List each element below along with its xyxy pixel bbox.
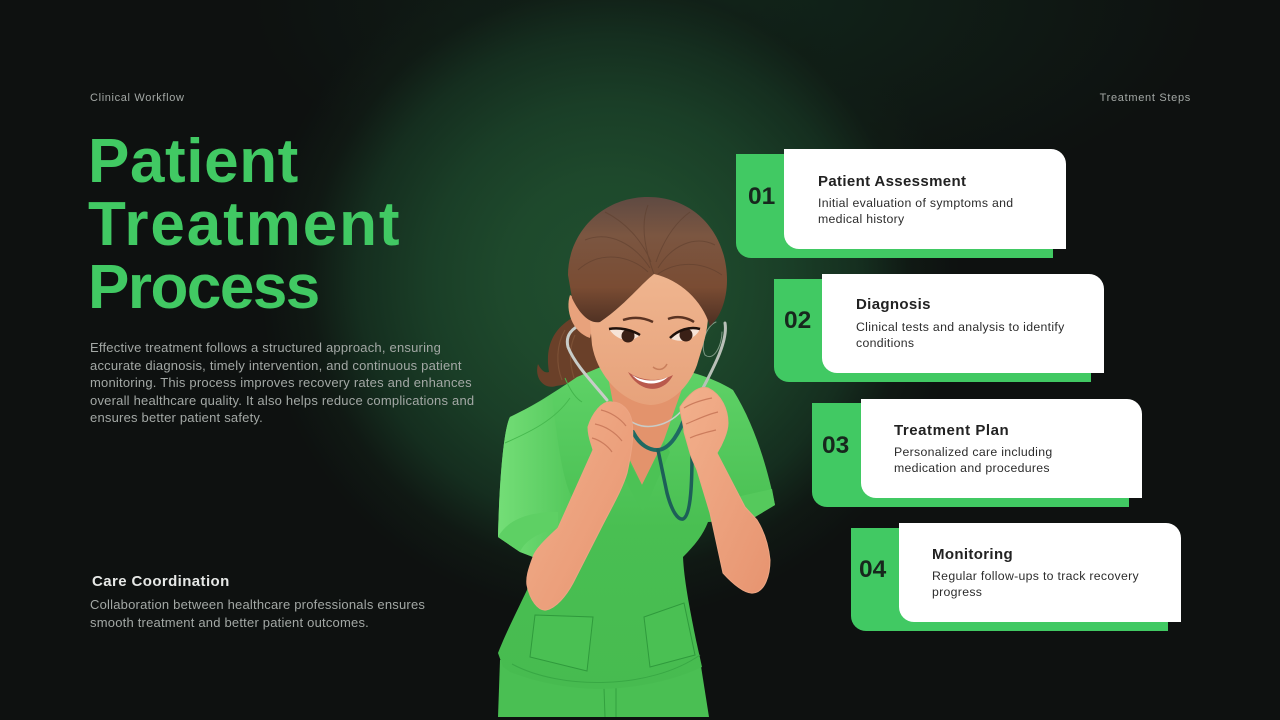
step number 01: 01 (748, 183, 775, 210)
face (588, 272, 708, 405)
step title: treatment plan: Treatment Plan (894, 422, 1009, 439)
ear (568, 295, 596, 338)
title: Patient (88, 127, 299, 196)
step title: diagnosis: Diagnosis (856, 296, 931, 313)
step number 04: 04 (859, 556, 886, 583)
left arm and hand (527, 402, 633, 610)
step card 01 (736, 149, 1066, 258)
nose (653, 364, 667, 369)
step description (818, 196, 1013, 226)
hair dome (568, 197, 727, 326)
right arm and hand (680, 387, 770, 593)
text block: intro paragraph: ensures better patient safety. (90, 410, 263, 425)
mouth (628, 372, 673, 389)
text block: intro paragraph: Effective treatment follows a structured approach, ensuring (90, 340, 441, 355)
step description: conditions (856, 336, 914, 350)
step description: Personalized care including (894, 445, 1052, 459)
step description (856, 320, 1065, 350)
right eye (670, 328, 700, 341)
step description: medical history (818, 212, 905, 226)
text block: intro paragraph: monitoring. This process improves recovery rates and enhances (90, 375, 472, 390)
ponytail (537, 318, 600, 387)
eyebrows (623, 317, 694, 322)
step number 03: 03 (822, 432, 849, 459)
step description: medication and procedures (894, 461, 1050, 475)
step description: progress (932, 585, 982, 599)
step description (932, 569, 1139, 599)
eyebrow: clinical workflow: Clinical Workflow (90, 92, 185, 104)
step card 02 (774, 274, 1104, 382)
text block: care coordination: Collaboration between healthcare professionals ensures (90, 597, 425, 612)
text block: care coordination (90, 597, 425, 630)
title (88, 127, 401, 322)
step card 04 (851, 523, 1181, 631)
step description: Regular follow-ups to track recovery (932, 569, 1139, 583)
step number 02: 02 (784, 307, 811, 334)
step description (894, 445, 1052, 475)
step title: monitoring: Monitoring (932, 546, 1013, 563)
neck and chest (606, 366, 688, 512)
text block: intro paragraph: overall healthcare quality. It also helps reduce complications and (90, 392, 474, 408)
step card 03 (812, 399, 1142, 507)
left eye (609, 328, 640, 340)
eyebrow: treatment steps: Treatment Steps (1100, 92, 1191, 104)
text block: intro paragraph (90, 340, 474, 425)
step description: Initial evaluation of symptoms and (818, 196, 1013, 210)
pants (498, 660, 709, 717)
title: Treatment (88, 190, 401, 259)
step description: Clinical tests and analysis to identify (856, 320, 1065, 334)
heading: care coordination: Care Coordination (92, 573, 230, 590)
text block: intro paragraph: accurate diagnosis, timely intervention, and continuous patient (90, 358, 462, 372)
stethoscope (567, 322, 725, 519)
text block: care coordination: smooth treatment and better patient outcomes. (90, 614, 369, 630)
scrub top (498, 366, 775, 689)
title: Process (88, 253, 319, 322)
step title: patient assessment: Patient Assessment (818, 173, 966, 190)
head (568, 197, 727, 405)
pockets (530, 603, 695, 671)
